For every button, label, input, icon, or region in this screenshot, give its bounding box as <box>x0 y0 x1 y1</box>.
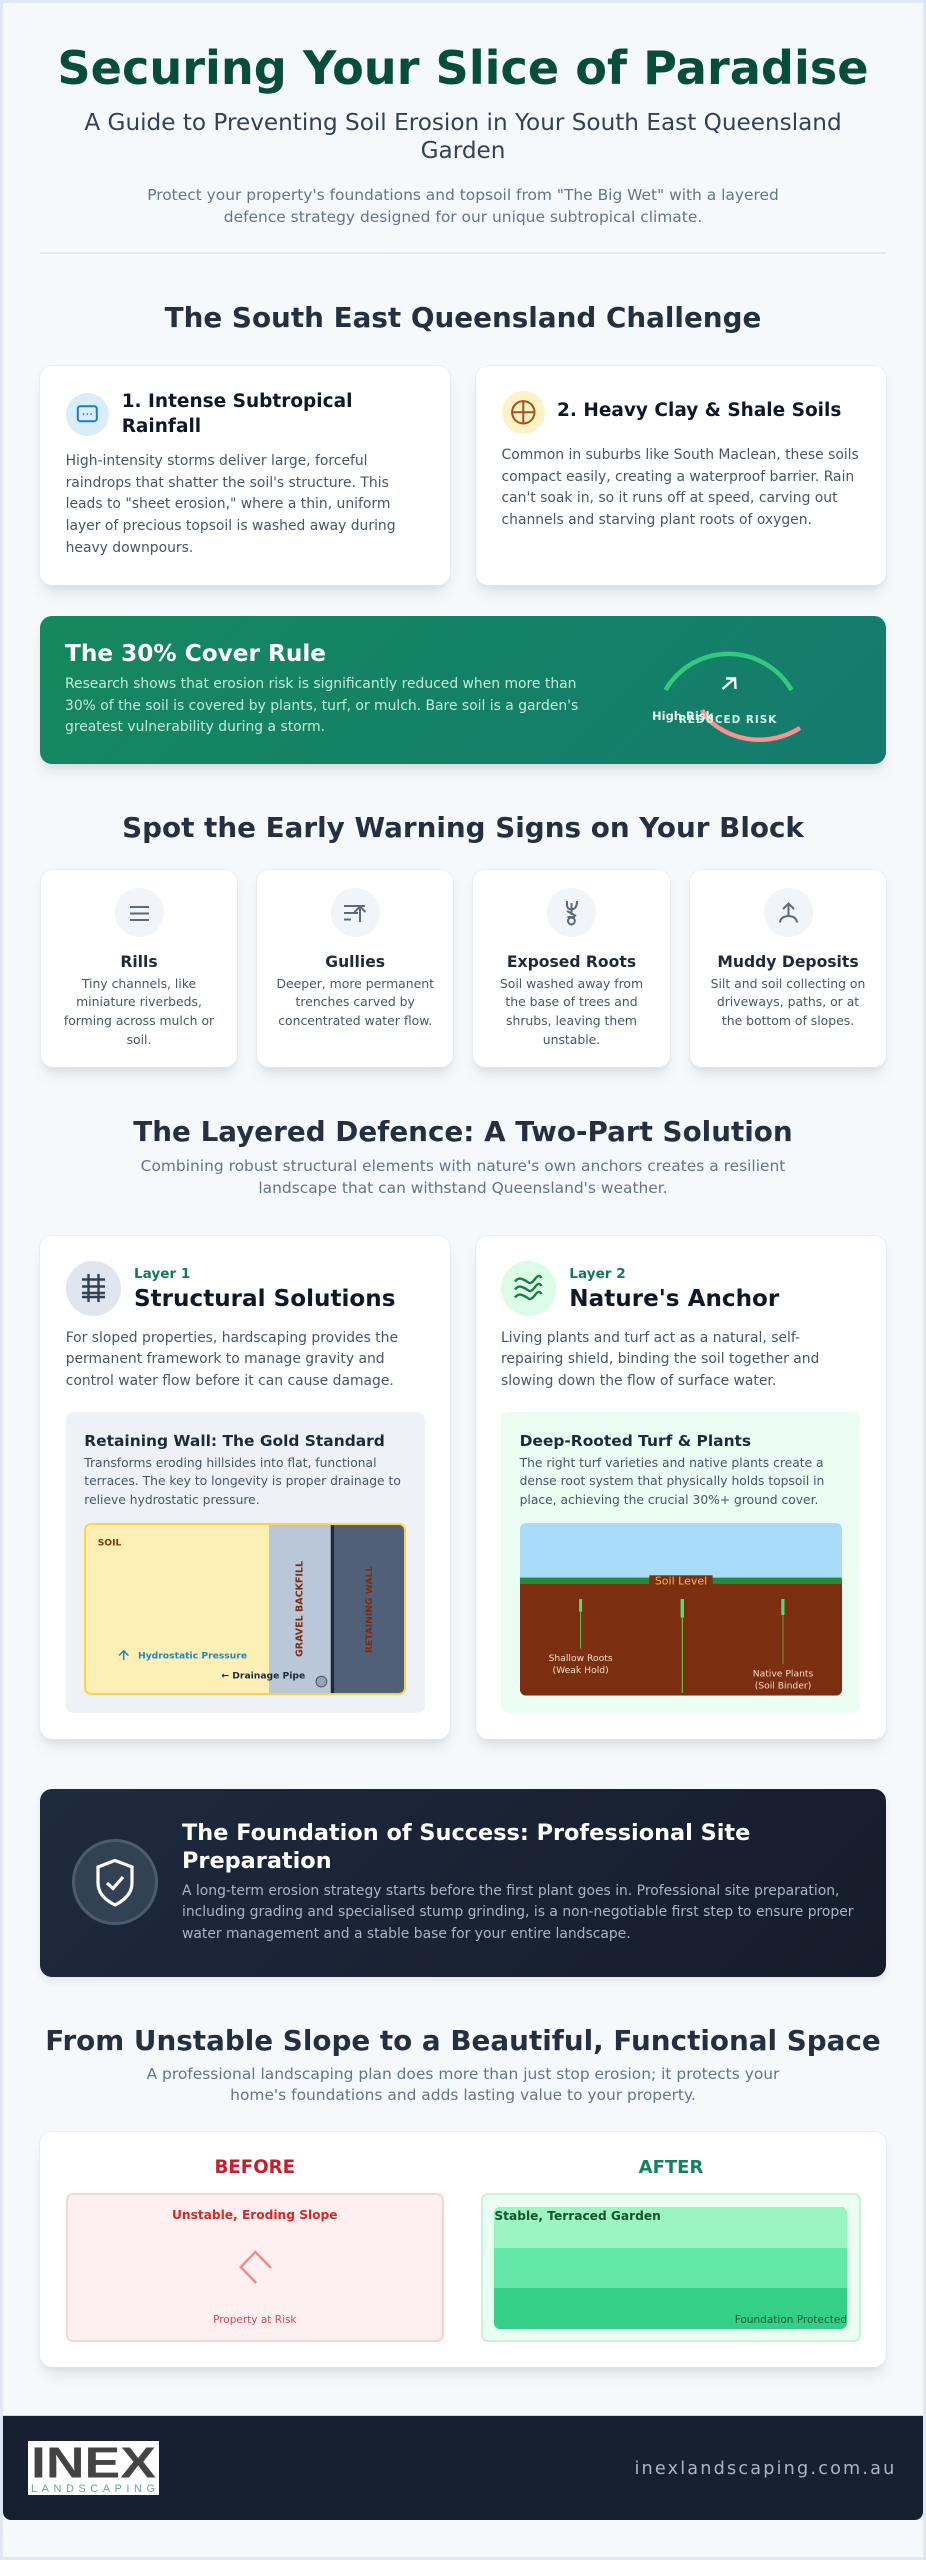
card text: heavy downpours. <box>66 540 193 556</box>
sign text <box>711 976 865 1028</box>
layer text: control water flow before it can cause damage. <box>66 1373 394 1389</box>
panel text: Transforms eroding hillsides into flat, functional <box>84 1456 376 1470</box>
panel: heavy clay <box>476 366 886 585</box>
panel: deep-rooted plants <box>501 1412 860 1713</box>
sign text: miniature riverbeds, <box>76 994 202 1009</box>
root depth diagram: Native Plants <box>752 1668 813 1679</box>
sign text: concentrated water flow. <box>278 1013 432 1028</box>
root depth diagram: Soil Level <box>654 1574 707 1587</box>
sign text: driveways, paths, or at <box>717 994 859 1009</box>
before heading: BEFORE <box>214 2157 295 2178</box>
section intro: layered defence: landscape that can withstand Queensland's weather. <box>258 1179 668 1197</box>
banner text: water management and a stable base for your entire landscape. <box>182 1926 631 1942</box>
panel: retaining wall <box>66 1412 425 1713</box>
sign text: Tiny channels, like <box>82 976 196 991</box>
banner heading <box>182 1820 750 1874</box>
card text: layer of precious topsoil is washed away during <box>66 518 396 534</box>
banner text: Research shows that erosion risk is significantly reduced when more than <box>65 676 576 692</box>
root depth diagram: (Weak Hold) <box>552 1665 608 1676</box>
section intro: layered defence: Combining robust structural elements with nature's own anchors creates a resilient <box>141 1157 785 1175</box>
after: terraced garden <box>481 2193 861 2342</box>
retaining wall diagram: GRAVEL BACKFILL <box>295 1561 306 1657</box>
risk gauge: REDUCED RISK <box>679 714 777 726</box>
icon: shield <box>72 1839 158 1925</box>
banner heading: The 30% Cover Rule <box>65 640 326 667</box>
card text: channels and starving plant roots of oxygen. <box>502 512 812 528</box>
layer text <box>501 1330 819 1389</box>
sign text: unstable. <box>543 1032 600 1047</box>
sign title: Muddy Deposits <box>717 953 859 971</box>
sign text: Soil washed away from <box>500 976 643 991</box>
heading: warning signs: Spot the Early Warning Signs on Your Block <box>122 811 804 844</box>
layer title: Nature's Anchor <box>569 1286 779 1312</box>
subtitle: A Guide to Preventing Soil Erosion in Your South East Queensland <box>84 110 842 136</box>
before: eroding slope <box>66 2193 444 2342</box>
banner text: greatest vulnerability during a storm. <box>65 719 325 735</box>
card text: leads to "sheet erosion," where a thin, uniform <box>66 496 390 512</box>
card text: raindrops that shatter the soil's structure. This <box>66 475 389 491</box>
panel: site preparation <box>40 1788 886 1976</box>
logo: LANDSCAPING <box>31 2483 155 2495</box>
sign text <box>500 976 643 1047</box>
layer text <box>66 1330 398 1389</box>
icon: roots <box>547 888 596 937</box>
panel: before and after <box>40 2132 886 2367</box>
panel: gullies <box>257 870 453 1067</box>
retaining wall diagram: Hydrostatic Pressure <box>138 1650 247 1661</box>
icon: unstable slope <box>239 2250 272 2284</box>
card heading <box>122 391 352 437</box>
retaining wall diagram: SOIL <box>98 1537 122 1548</box>
layer text: Living plants and turf act as a natural, self- <box>501 1330 800 1346</box>
section intro: layered defence <box>141 1157 785 1197</box>
terraces <box>494 2207 847 2329</box>
panel text: place, achieving the crucial 30%+ ground cover. <box>520 1493 818 1507</box>
card text <box>66 453 396 556</box>
banner text: 30% of the soil is covered by plants, turf, or mulch. Bare soil is a garden's <box>65 698 578 714</box>
panel text: relieve hydrostatic pressure. <box>84 1493 260 1507</box>
retaining wall diagram <box>84 1523 406 1695</box>
layer text: repairing shield, binding the soil together and <box>501 1351 819 1367</box>
sign text: the base of trees and <box>505 994 638 1009</box>
after heading: AFTER <box>639 2157 703 2178</box>
section intro: before and after: A professional landscaping plan does more than just stop erosion; it protects your <box>147 2064 779 2082</box>
heading: before and after: From Unstable Slope to a Beautiful, Functional Space <box>45 2024 881 2057</box>
sign title: Gullies <box>325 953 385 971</box>
sign text <box>276 976 434 1028</box>
icon: rills <box>114 888 164 937</box>
logo <box>28 2441 159 2495</box>
card heading: 1. Intense Subtropical <box>122 391 352 412</box>
root depth diagram <box>520 1523 842 1696</box>
after caption: Foundation Protected <box>735 2314 847 2326</box>
after label: Stable, Terraced Garden <box>494 2209 661 2223</box>
before caption: Property at Risk <box>213 2314 296 2326</box>
icon: waves <box>501 1261 556 1316</box>
sign text: forming across mulch or <box>64 1013 214 1028</box>
panel: 30% cover rule <box>40 616 886 764</box>
panel text: dense root system that physically holds topsoil in <box>520 1474 824 1488</box>
banner heading: Preparation <box>182 1848 332 1874</box>
card text: can't soak in, so it runs off at speed, carving out <box>502 490 838 506</box>
layer text: permanent framework to manage gravity and <box>66 1351 385 1367</box>
panel heading: Retaining Wall: The Gold Standard <box>84 1432 385 1450</box>
heading: the challenge: The South East Queensland Challenge <box>165 301 761 334</box>
panel: structural solutions <box>40 1236 450 1739</box>
layer text: For sloped properties, hardscaping provides the <box>66 1330 398 1346</box>
panel: muddy deposits <box>690 870 886 1067</box>
panel: intense rainfall <box>40 366 450 585</box>
banner text: A long-term erosion strategy starts before the first plant goes in. Professional site preparation, <box>182 1882 839 1898</box>
icon: structure <box>66 1261 121 1316</box>
layer title: Structural Solutions <box>134 1286 395 1312</box>
retaining wall diagram: RETAINING WALL <box>364 1565 375 1653</box>
sign text: Deeper, more permanent <box>276 976 434 991</box>
layer label: Layer 1 <box>134 1266 190 1282</box>
panel text: terraces. The key to longevity is proper drainage to <box>84 1474 401 1488</box>
layer text: slowing down the flow of surface water. <box>501 1373 776 1389</box>
website: inexlandscaping.com.au <box>634 2458 896 2478</box>
heading: layered defence: The Layered Defence: A Two-Part Solution <box>133 1115 793 1148</box>
banner heading: The Foundation of Success: Professional Site <box>182 1820 750 1846</box>
risk gauge: High Risk <box>652 709 714 723</box>
sign text: shrubs, leaving them <box>506 1013 637 1028</box>
subtitle <box>84 110 842 164</box>
panel: nature's anchor <box>476 1236 886 1739</box>
banner text: including grading and specialised stump grinding, is a non-negotiable first step to ensure proper <box>182 1904 854 1920</box>
retaining wall diagram: ← Drainage Pipe <box>222 1670 306 1681</box>
panel heading: Deep-Rooted Turf & Plants <box>520 1432 751 1450</box>
panel: rills <box>40 870 237 1067</box>
layer label: Layer 2 <box>569 1266 626 1282</box>
title: Securing Your Slice of Paradise <box>57 41 869 95</box>
icon: deposits <box>764 888 812 937</box>
intro text <box>147 186 779 226</box>
sign text: Silt and soil collecting on <box>711 976 865 991</box>
card heading: 2. Heavy Clay & Shale Soils <box>557 400 841 421</box>
banner text <box>182 1882 854 1942</box>
icon: clay soil <box>502 391 544 434</box>
sign text: trenches carved by <box>296 994 415 1009</box>
card text <box>502 447 859 528</box>
banner text <box>65 676 578 735</box>
risk gauge <box>652 652 802 742</box>
panel text <box>520 1456 824 1507</box>
card text: Common in suburbs like South Maclean, these soils <box>502 447 859 463</box>
sign text <box>64 976 214 1047</box>
section intro: before and after: home's foundations and adds lasting value to your property. <box>230 2086 696 2104</box>
sign title: Exposed Roots <box>507 953 636 971</box>
card text: compact easily, creating a waterproof barrier. Rain <box>502 468 854 484</box>
intro text: Protect your property's foundations and topsoil from "The Big Wet" with a layered <box>147 186 779 204</box>
sign title: Rills <box>120 953 158 971</box>
card heading: Rainfall <box>122 416 201 437</box>
root depth diagram: (Soil Binder) <box>754 1680 811 1691</box>
panel: exposed roots <box>473 870 670 1067</box>
before label: Unstable, Eroding Slope <box>172 2208 338 2222</box>
root depth diagram: Shallow Roots <box>548 1653 612 1664</box>
panel text <box>84 1456 401 1507</box>
footer <box>3 2416 923 2520</box>
intro text: defence strategy designed for our unique subtropical climate. <box>224 208 702 226</box>
section intro: before and after <box>146 2064 780 2104</box>
card text: High-intensity storms deliver large, forceful <box>66 453 368 469</box>
sign text: the bottom of slopes. <box>722 1013 854 1028</box>
panel text: The right turf varieties and native plants create a <box>520 1456 824 1470</box>
sign text: soil. <box>127 1032 151 1047</box>
icon: rainfall <box>66 393 109 436</box>
icon: gullies <box>331 888 380 937</box>
subtitle: Garden <box>421 138 505 164</box>
